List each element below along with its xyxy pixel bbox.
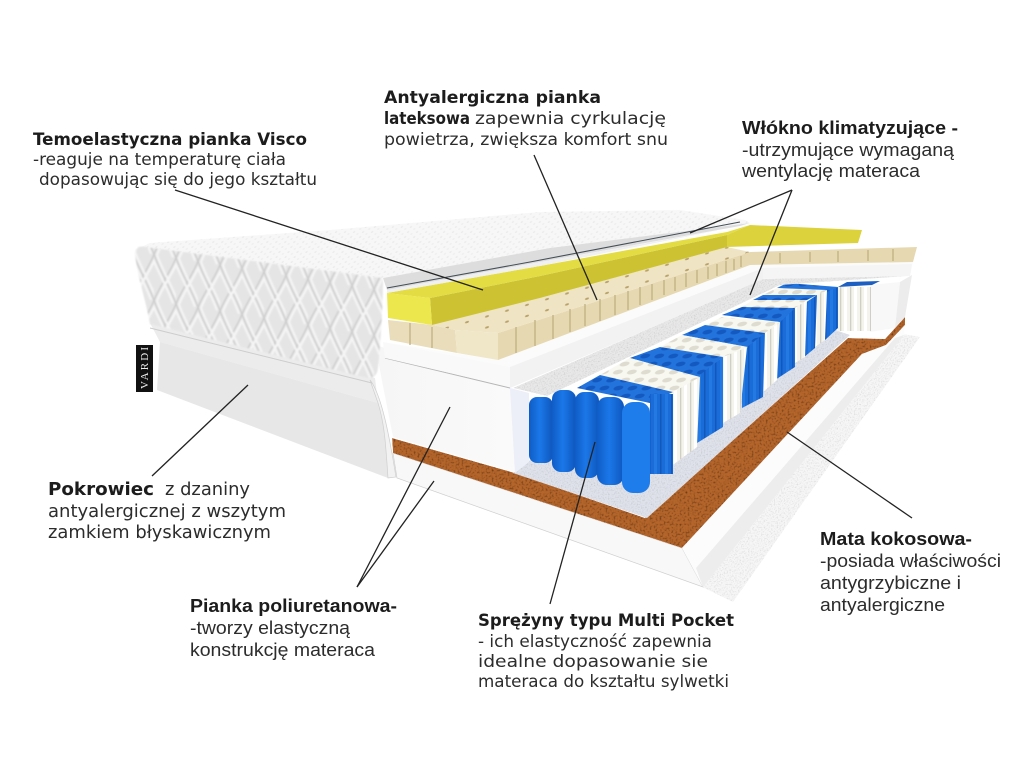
label: coconut mat: antygrzybiczne i	[820, 572, 961, 593]
label: cover: antyalergicznej z wszytym	[48, 501, 286, 522]
white foam top plank	[383, 262, 913, 388]
ventilation mesh edge	[383, 222, 750, 293]
inner foam wall	[510, 388, 529, 473]
cover top surface	[135, 210, 750, 278]
felt underlay	[700, 334, 920, 602]
leader lines	[152, 155, 912, 604]
bottom polyurethane foam	[393, 325, 905, 587]
label: climate fibre	[741, 117, 958, 181]
label: climate fibre: wentylację materaca	[741, 160, 921, 181]
label: visco foam: dopasowując się do jego kształtu	[39, 170, 317, 189]
label: polyurethane foam	[190, 595, 397, 660]
label: visco foam	[33, 130, 317, 189]
label: multi pocket springs: materaca do kształtu sylwetki	[478, 672, 729, 691]
label: cover: z dzaniny	[165, 479, 250, 500]
latex foam layer	[388, 247, 917, 360]
pocket springs	[529, 281, 880, 493]
label: latex foam: powietrza, zwiększa komfort snu	[384, 130, 668, 150]
label: multi pocket springs: Sprężyny typu Multi Pocket	[478, 611, 734, 630]
brand label: VARDI	[139, 347, 151, 389]
label: climate fibre: -utrzymujące wymaganą	[742, 139, 955, 160]
label: latex foam	[384, 88, 668, 150]
grey climate fibre sheet	[513, 276, 908, 396]
lower cover flap	[150, 323, 396, 478]
label: multi pocket springs	[478, 611, 734, 691]
mattress cross-section illustration	[135, 210, 920, 602]
label: latex foam: Antyalergiczna pianka	[384, 88, 601, 108]
label: visco foam: -reaguje na temperaturę ciała	[33, 150, 286, 169]
label: coconut mat: antyalergiczne	[820, 594, 945, 615]
upper foam block left face	[375, 345, 515, 472]
spring rows	[577, 283, 838, 467]
label: latex foam: zapewnia cyrkulację	[475, 109, 666, 129]
coconut mat	[392, 317, 905, 548]
label: coconut mat: Mata kokosowa-	[820, 528, 972, 549]
label: climate fibre: Włókno klimatyzujące -	[742, 117, 958, 138]
felt under springs	[513, 328, 850, 518]
label: polyurethane foam: konstrukcję materaca	[190, 639, 376, 660]
brand label	[136, 345, 153, 392]
label: multi pocket springs: - ich elastyczność zapewnia	[478, 632, 712, 651]
label: coconut mat: -posiada właściwości	[820, 550, 1001, 571]
label: cover: Pokrowiec	[48, 479, 154, 500]
yellow visco foam	[387, 225, 862, 325]
label: coconut mat	[820, 528, 1001, 615]
label: visco foam: Temoelastyczna pianka Visco	[33, 130, 307, 149]
quilted folded cover	[135, 247, 383, 378]
label: multi pocket springs: idealne dopasowanie sie	[478, 652, 708, 671]
far white coils	[838, 281, 880, 331]
front blue coils	[529, 390, 673, 493]
right inner wall	[870, 282, 900, 332]
latex slots	[410, 249, 893, 353]
label: polyurethane foam: -tworzy elastyczną	[190, 617, 351, 638]
label: cover	[48, 479, 286, 543]
label: cover: zamkiem błyskawicznym	[48, 522, 271, 543]
label: latex foam: lateksowa	[384, 109, 470, 129]
label: polyurethane foam: Pianka poliuretanowa-	[190, 595, 397, 616]
